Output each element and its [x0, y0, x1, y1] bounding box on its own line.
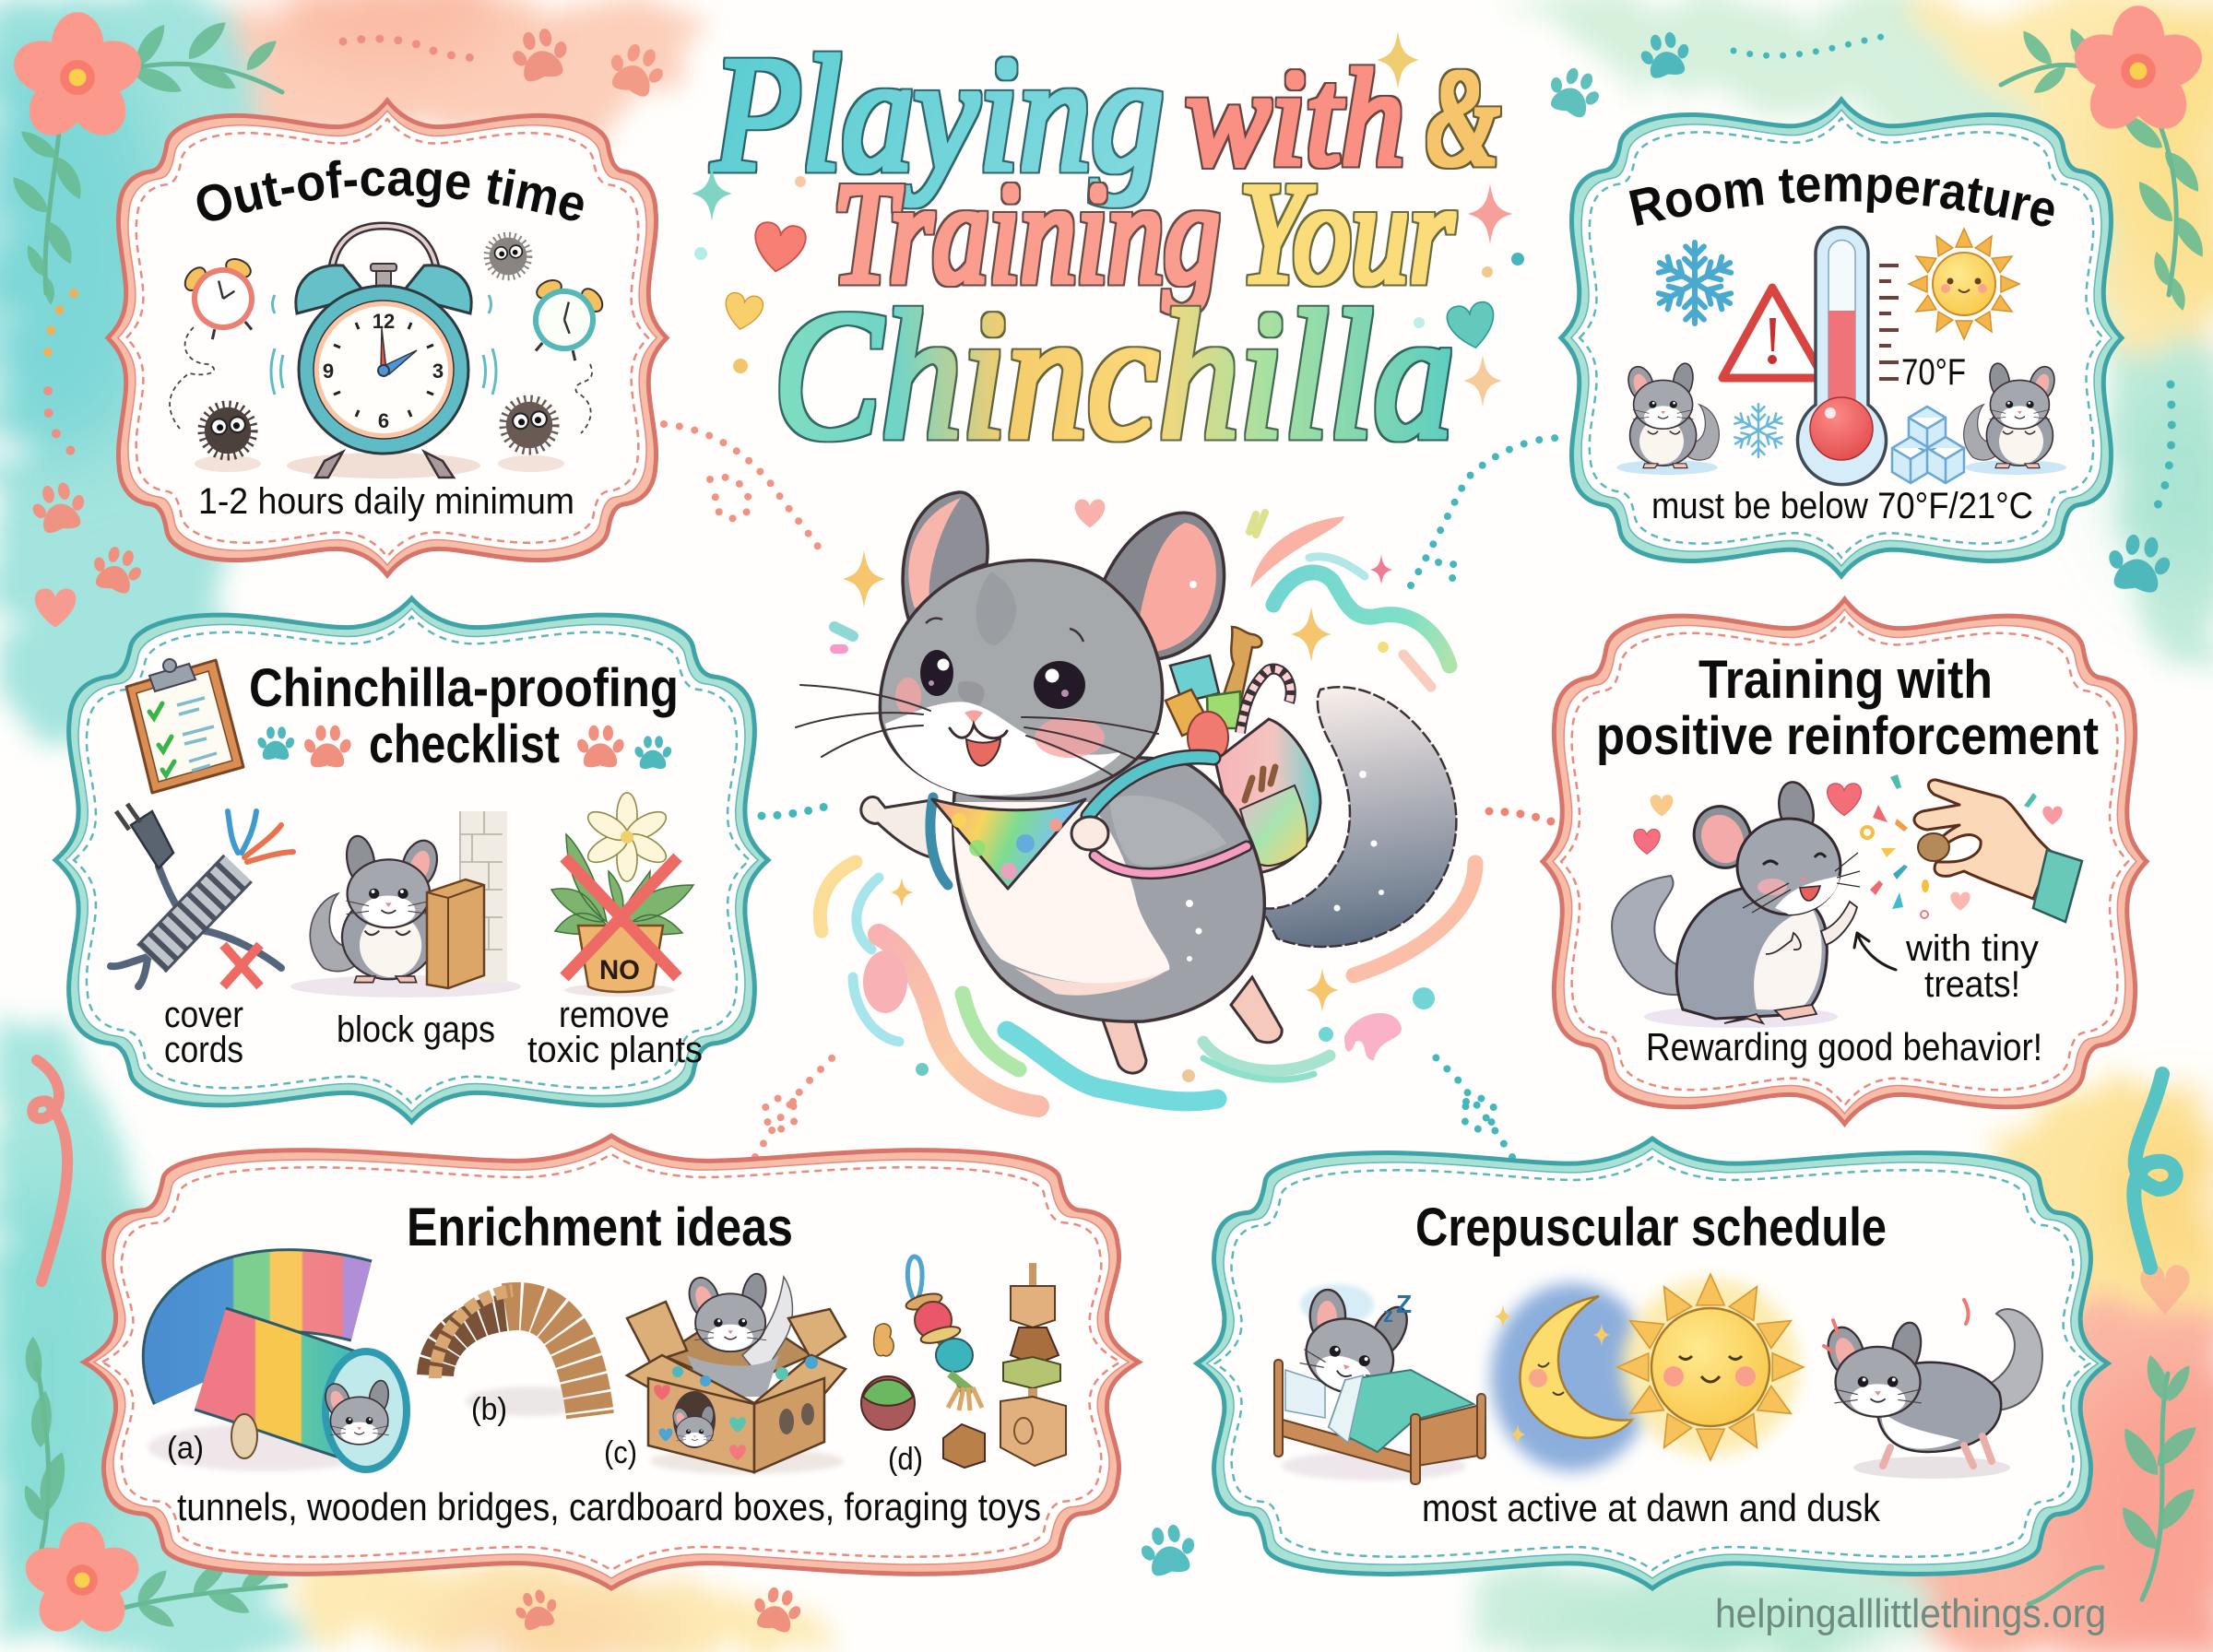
title sparkles and hearts: [692, 31, 1524, 407]
icon: confetti and hearts: [1634, 774, 2063, 918]
title: Chinchilla: [774, 274, 1454, 478]
arms: [861, 796, 1226, 866]
callout: with tiny treats: treats!: [1924, 964, 2020, 1005]
icon: sun: [1617, 1274, 1804, 1460]
panel: enrichment ideas: [84, 1136, 1139, 1588]
icon: small teal clock: [519, 272, 610, 365]
title: with: [1186, 41, 1404, 195]
icon: happy chinchilla: [1612, 779, 1860, 1028]
icon: paws beside checklist: [256, 726, 673, 769]
icon: ice cubes: [1892, 407, 1964, 483]
icon: running chinchilla: [1822, 1300, 2042, 1479]
title: Your: [1239, 153, 1454, 314]
website credit: helpingalllittlethings.org: [1715, 1591, 2106, 1636]
title: Training: [833, 153, 1220, 314]
icon: toxic plant with X: [551, 793, 693, 997]
icon: snowflake large: [1654, 242, 1735, 324]
subtitle: most active at dawn and dusk: [1422, 1486, 1881, 1529]
icon: foraging toys: [861, 1257, 1066, 1468]
decoration: hearts on left: [35, 588, 76, 627]
central swirls and sparkles: [820, 500, 1475, 1106]
legs: [1099, 977, 1282, 1073]
heading: Crepuscular schedule: [1415, 1198, 1887, 1257]
icon: plug: [116, 804, 173, 868]
heading: positive reinforcement: [1596, 706, 2099, 766]
70F label: 70°F: [1901, 352, 1966, 393]
icon: sun: [1909, 229, 2019, 339]
label: remove toxic plants: [527, 995, 703, 1070]
central chinchilla with backpack: [796, 492, 1456, 1073]
arrow to chinchilla: [1854, 933, 1896, 970]
label: cover cords: [164, 995, 243, 1070]
icon: chilly chinchilla left: [1616, 361, 1719, 475]
icon: red X on cords: [223, 945, 260, 986]
icon: toxic plant with X: NO: [599, 955, 640, 985]
icon: sleeping chinchilla in bed: z: [1383, 1304, 1393, 1327]
label: d: (d): [888, 1442, 923, 1477]
label: c: (c): [604, 1435, 637, 1470]
label: block gaps: block gaps: [337, 1009, 495, 1050]
icon: dust bunnies: [170, 238, 592, 472]
icon: frayed cords: [111, 811, 293, 986]
plaque frame teal: [55, 598, 768, 1122]
icon: moon in night sky: [1491, 1283, 1653, 1471]
icon: chilly chinchilla right: [1964, 361, 2066, 475]
label: remove toxic plants: toxic plants: [527, 1030, 703, 1070]
icon: cardboard box with chinchilla: [627, 1272, 846, 1474]
panel: out-of-cage time: [105, 97, 669, 579]
subtitle: must be below 70°F/21°C: [1651, 486, 2033, 526]
icon: sleeping chinchilla in bed: [1274, 1277, 1485, 1484]
heading: [249, 658, 679, 774]
panel: out-of-cage time: Out-of-cage time: [197, 160, 584, 221]
heading: Chinchilla-proofing: [249, 658, 679, 718]
paw on strap: [1071, 817, 1108, 850]
icon: thermometer: [1798, 227, 1899, 485]
panel: training with positive reinforcement: [1543, 599, 2147, 1124]
icon: chinchilla blocking gap: [290, 811, 521, 997]
tail: [1261, 687, 1456, 947]
label: b: (b): [471, 1392, 507, 1427]
icon: clipboard: [126, 659, 243, 793]
backpack straps: [930, 757, 1247, 885]
icon: big alarm clock: 3: [432, 360, 444, 383]
icon: big alarm clock: 6: [378, 409, 389, 432]
label: cover cords: cover: [164, 995, 243, 1035]
title: &: [1426, 41, 1498, 195]
icon: warning triangle: [1722, 288, 1824, 378]
label: a: (a): [167, 1431, 204, 1466]
icon: small coral clock: [177, 251, 268, 344]
title: Playing: [712, 22, 1164, 206]
label: cover cords: cords: [164, 1030, 243, 1070]
heading: Training with: [1698, 650, 1993, 710]
icon: sleeping chinchilla in bed: Z: [1396, 1290, 1412, 1318]
icon: big alarm clock: 12: [373, 310, 395, 333]
callout: with tiny treats: [1905, 928, 2039, 1005]
icon: wooden bridge: [435, 1291, 595, 1416]
panel: room temperature: [1558, 96, 2124, 580]
head: [796, 560, 1163, 798]
backpack with treats: [1166, 627, 1320, 873]
subtitle: Rewarding good behavior!: [1646, 1025, 2042, 1068]
panel: chinchilla-proofing checklist: [55, 598, 768, 1122]
label: remove toxic plants: remove: [559, 995, 669, 1035]
heading: Enrichment ideas: [407, 1198, 793, 1257]
heading: [1596, 650, 2099, 766]
panel: crepuscular schedule: [1197, 1139, 2108, 1588]
panel: room temperature: Room temperature: [1628, 170, 2054, 227]
heading: checklist: [369, 714, 560, 774]
ears: [903, 492, 1225, 660]
bandana: [932, 799, 1085, 889]
plaque frame coral: [108, 100, 667, 575]
decoration: ribbons: [32, 1060, 2176, 1281]
decoration: dotted trails: [48, 37, 2172, 1157]
plaque frame coral: [1543, 599, 2147, 1124]
icon: small snowflake: [1732, 404, 1785, 457]
icon: hand with treat: [1914, 780, 2082, 922]
plaque frame coral: [84, 1136, 1139, 1588]
callout: with tiny treats: with tiny: [1905, 928, 2039, 969]
body: [953, 758, 1264, 1021]
plaque frame teal: [1197, 1139, 2108, 1588]
icon: big alarm clock: [271, 226, 496, 478]
subtitle: 1-2 hours daily minimum: [198, 481, 574, 522]
heading: [201, 195, 586, 225]
icon: big alarm clock: 9: [323, 360, 334, 383]
icon: rainbow tunnel: [148, 1291, 407, 1471]
title: [712, 22, 1498, 478]
heading: [1634, 201, 2053, 229]
subtitle: tunnels, wooden bridges, cardboard boxes, foraging toys: [177, 1485, 1041, 1528]
plaque frame teal: [1561, 100, 2122, 576]
